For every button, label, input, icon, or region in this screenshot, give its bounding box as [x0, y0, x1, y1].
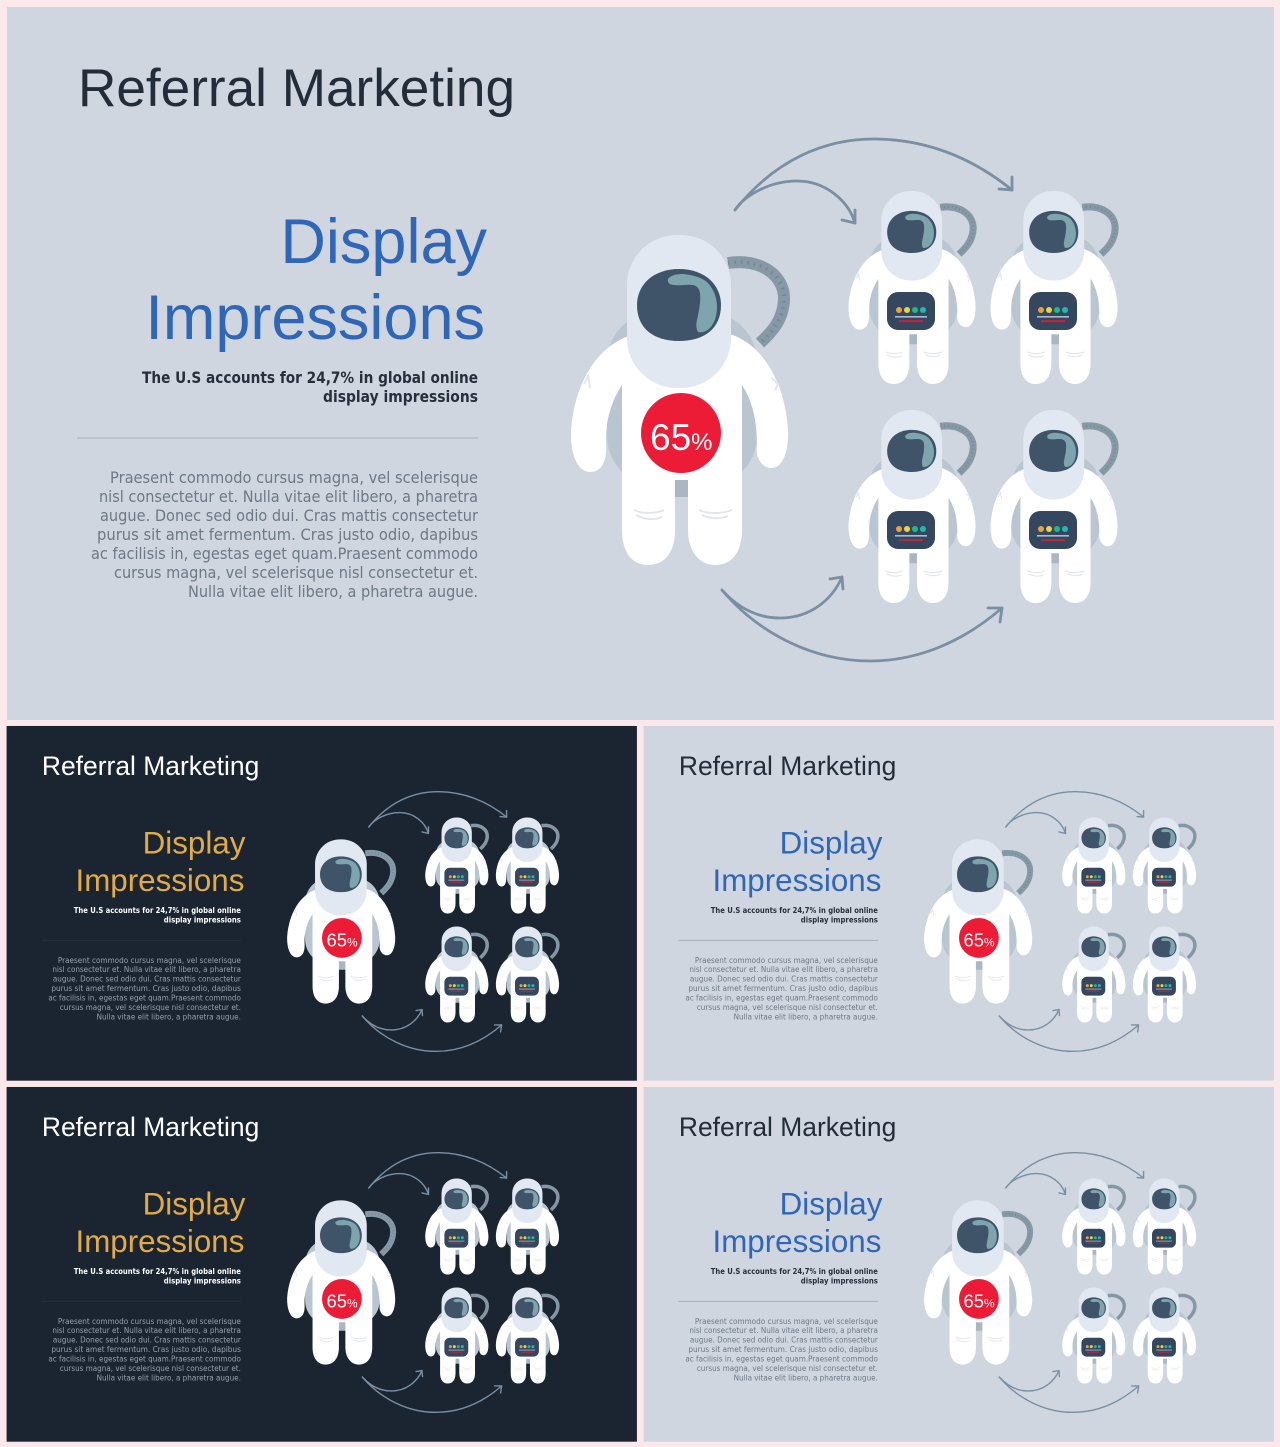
- panel: dark slide top left: [7, 726, 637, 1081]
- subheading: The U.S accounts for 24,7% in global online: [711, 906, 878, 915]
- body text: [91, 468, 478, 601]
- astronaut illustration with arrows: [924, 792, 1196, 1051]
- body text: augue. Donec sed odio dui. Cras mattis consectetur: [690, 975, 879, 984]
- heading: display impressions: Display: [780, 825, 883, 860]
- body text: purus sit amet fermentum. Cras justo odio, dapibus: [51, 1345, 241, 1354]
- subheading: [711, 1267, 878, 1285]
- body text: Nulla vitae elit libero, a pharetra augue.: [734, 1013, 878, 1022]
- body text: augue. Donec sed odio dui. Cras mattis consectetur: [100, 506, 478, 525]
- subheading: [74, 906, 241, 924]
- body text: [48, 956, 242, 1022]
- heading: display impressions: Display: [280, 207, 487, 277]
- body text: Nulla vitae elit libero, a pharetra augue.: [97, 1374, 241, 1383]
- subheading: The U.S accounts for 24,7% in global online: [74, 906, 241, 915]
- panel: dark slide bottom left: [7, 1087, 637, 1442]
- heading: display impressions: Impressions: [712, 863, 881, 898]
- body text: nisl consectetur et. Nulla vitae elit libero, a pharetra: [99, 487, 478, 506]
- body text: cursus magna, vel scelerisque nisl consectetur et.: [697, 1364, 878, 1373]
- body text: [685, 1317, 879, 1383]
- body text: Praesent commodo cursus magna, vel scelerisque: [58, 1317, 241, 1326]
- subheading: display impressions: [801, 1276, 878, 1285]
- stat: 65 percent: 65%: [650, 417, 712, 458]
- body text: ac facilisis in, egestas eget quam.Praesent commodo: [48, 994, 241, 1003]
- heading: display impressions: Impressions: [75, 863, 244, 898]
- body text: Nulla vitae elit libero, a pharetra augue.: [734, 1374, 878, 1383]
- title: Referral Marketing: [679, 1112, 896, 1142]
- heading: display impressions: Display: [143, 825, 246, 860]
- heading: display impressions: [712, 1186, 883, 1259]
- panel: light slide bottom right: [644, 1087, 1274, 1442]
- title: Referral Marketing: [42, 1112, 259, 1142]
- heading: display impressions: Display: [780, 1186, 883, 1221]
- astronaut illustration with arrows: [924, 1153, 1196, 1412]
- body text: nisl consectetur et. Nulla vitae elit libero, a pharetra: [689, 965, 878, 974]
- body text: ac facilisis in, egestas eget quam.Praesent commodo: [48, 1355, 241, 1364]
- stat: 65 percent: 65%: [963, 929, 995, 950]
- subheading: display impressions: [164, 1276, 241, 1285]
- subheading: The U.S accounts for 24,7% in global online: [74, 1267, 241, 1276]
- subheading: [711, 906, 878, 924]
- body text: ac facilisis in, egestas eget quam.Praesent commodo: [91, 544, 478, 563]
- body text: purus sit amet fermentum. Cras justo odio, dapibus: [688, 1345, 878, 1354]
- subheading: display impressions: [323, 387, 478, 406]
- astronaut illustration with arrows: [287, 792, 559, 1051]
- astronaut illustration with arrows: [571, 139, 1118, 661]
- body text: ac facilisis in, egestas eget quam.Praesent commodo: [685, 994, 878, 1003]
- body text: purus sit amet fermentum. Cras justo odio, dapibus: [97, 525, 478, 544]
- body text: cursus magna, vel scelerisque nisl consectetur et.: [114, 563, 478, 582]
- title: Referral Marketing: [42, 751, 259, 781]
- body text: Nulla vitae elit libero, a pharetra augue.: [188, 582, 478, 601]
- heading: display impressions: [712, 825, 883, 898]
- title: Referral Marketing: [78, 59, 515, 118]
- body text: Praesent commodo cursus magna, vel scelerisque: [695, 1317, 878, 1326]
- stat: 65 percent: 65%: [326, 1290, 358, 1311]
- heading: display impressions: [75, 1186, 246, 1259]
- heading: display impressions: Impressions: [145, 283, 485, 353]
- stat: 65 percent: 65%: [326, 929, 358, 950]
- subheading: display impressions: [164, 915, 241, 924]
- panel: light slide top right: [644, 726, 1274, 1081]
- subheading: [142, 368, 478, 406]
- heading: display impressions: [145, 207, 487, 353]
- subheading: The U.S accounts for 24,7% in global online: [142, 368, 478, 387]
- body text: ac facilisis in, egestas eget quam.Praesent commodo: [685, 1355, 878, 1364]
- heading: display impressions: Impressions: [75, 1224, 244, 1259]
- body text: nisl consectetur et. Nulla vitae elit libero, a pharetra: [52, 965, 241, 974]
- body text: cursus magna, vel scelerisque nisl consectetur et.: [60, 1364, 241, 1373]
- panel: main light slide: [7, 7, 1274, 720]
- body text: Praesent commodo cursus magna, vel scelerisque: [695, 956, 878, 965]
- body text: cursus magna, vel scelerisque nisl consectetur et.: [60, 1003, 241, 1012]
- body text: Praesent commodo cursus magna, vel scelerisque: [58, 956, 241, 965]
- body text: augue. Donec sed odio dui. Cras mattis consectetur: [690, 1336, 879, 1345]
- heading: display impressions: [75, 825, 246, 898]
- body text: nisl consectetur et. Nulla vitae elit libero, a pharetra: [52, 1326, 241, 1335]
- body text: purus sit amet fermentum. Cras justo odio, dapibus: [51, 984, 241, 993]
- body text: nisl consectetur et. Nulla vitae elit libero, a pharetra: [689, 1326, 878, 1335]
- body text: [48, 1317, 242, 1383]
- astronaut illustration with arrows: [287, 1153, 559, 1412]
- heading: display impressions: Impressions: [712, 1224, 881, 1259]
- title: Referral Marketing: [679, 751, 896, 781]
- body text: Praesent commodo cursus magna, vel scelerisque: [110, 468, 478, 487]
- heading: display impressions: Display: [143, 1186, 246, 1221]
- body text: [685, 956, 879, 1022]
- body text: purus sit amet fermentum. Cras justo odio, dapibus: [688, 984, 878, 993]
- body text: Nulla vitae elit libero, a pharetra augue.: [97, 1013, 241, 1022]
- body text: augue. Donec sed odio dui. Cras mattis consectetur: [53, 1336, 242, 1345]
- body text: augue. Donec sed odio dui. Cras mattis consectetur: [53, 975, 242, 984]
- subheading: display impressions: [801, 915, 878, 924]
- subheading: The U.S accounts for 24,7% in global online: [711, 1267, 878, 1276]
- subheading: [74, 1267, 241, 1285]
- stat: 65 percent: 65%: [963, 1290, 995, 1311]
- body text: cursus magna, vel scelerisque nisl consectetur et.: [697, 1003, 878, 1012]
